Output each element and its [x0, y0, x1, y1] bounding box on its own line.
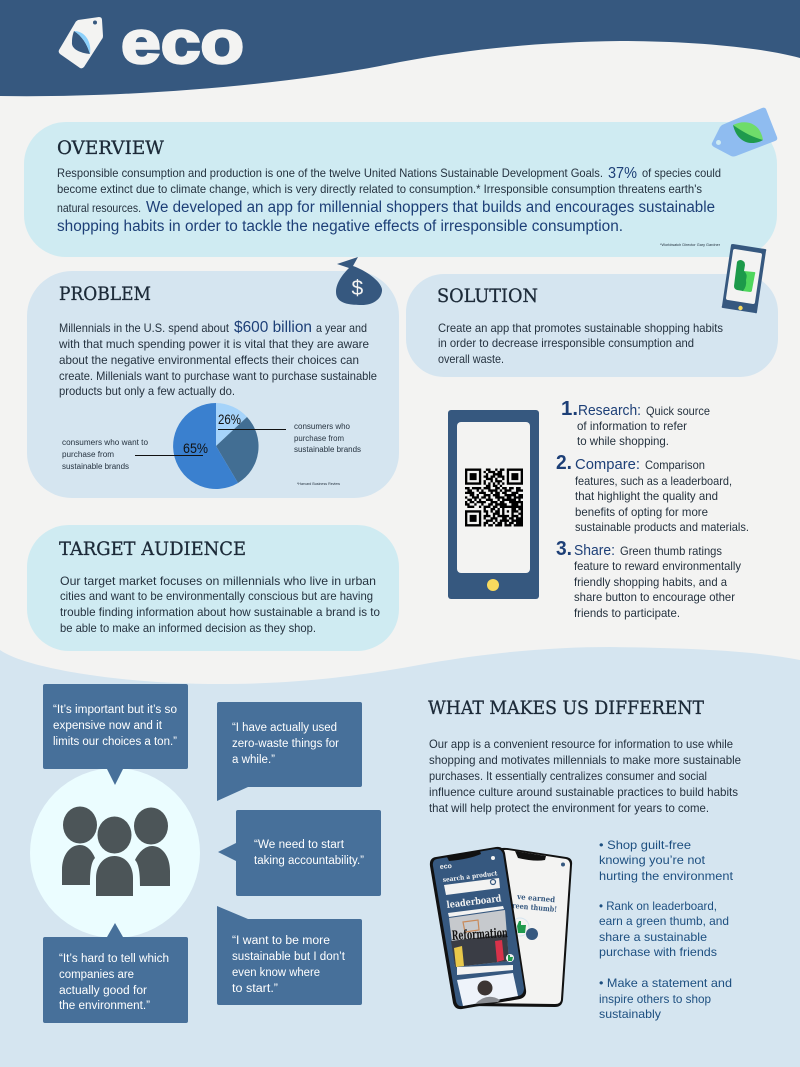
- problem text: create. Millenials want to purchase want to purchase sustainable: [59, 369, 377, 383]
- step 2: compare: benefits of opting for more: [575, 505, 708, 519]
- pie label: purchasers: purchase from: [294, 434, 344, 443]
- logo wordmark: eco: [121, 9, 244, 76]
- overview text: [57, 165, 721, 235]
- back phone: earned green thumb: [470, 848, 572, 1007]
- icon: money bag: [336, 257, 382, 305]
- step 3: share: feature to reward environmentally: [574, 559, 741, 573]
- front phone: leaderboard: [430, 847, 526, 1009]
- step 2: compare: sustainable products and materials.: [575, 520, 749, 534]
- speech bubble: which companies: actually good for: [59, 985, 147, 997]
- target audience text: Our target market focuses on millennials who live in urban: [60, 574, 376, 588]
- overview text: 37%: [608, 165, 637, 182]
- problem text: $600 billion: [234, 319, 312, 336]
- problem text: with that much spending power it is vital that they are aware: [58, 337, 369, 351]
- bullet: make a statement: inspire others to shop: [599, 992, 711, 1006]
- speech bubble: which companies: “It’s hard to tell which: [59, 953, 169, 965]
- problem text: [58, 319, 377, 398]
- different text: [429, 737, 741, 815]
- speech bubble: expensive: [43, 684, 188, 785]
- icon: leaf price tag: [712, 108, 777, 156]
- speech bubble: which companies: the environment.”: [59, 1000, 150, 1012]
- speech bubble: accountability: taking accountability.”: [254, 855, 364, 867]
- front phone: leaderboard: eco: [440, 863, 452, 871]
- different text: purchases. It essentially centralizes consumer and social: [429, 769, 707, 783]
- pie label: want to purchase: consumers who want to: [62, 438, 149, 447]
- step 1: research: 1.: [561, 398, 578, 420]
- pie label: want to purchase: sustainable brands: [62, 462, 129, 471]
- different text: that will help protect the environment for years to come.: [429, 801, 709, 815]
- target audience text: cities and want to be environmentally conscious but are having: [60, 589, 373, 603]
- pie chart: 65%: [183, 440, 208, 456]
- bullet: make a statement: • Make a statement and: [599, 976, 732, 990]
- step 1: research: [561, 398, 710, 448]
- speech bubble: where to start: sustainable but I don’t: [232, 951, 346, 963]
- overview text: We developed an app for millennial shoppers that builds and encourages sustainable: [146, 199, 715, 216]
- step 3: share: Share:: [574, 542, 615, 559]
- phone mockups: [430, 847, 572, 1009]
- step 3: share: [556, 538, 741, 620]
- speech bubble: where to start: [217, 906, 362, 1005]
- step 2: compare: 2.: [556, 452, 572, 474]
- solution text: overall waste.: [438, 352, 504, 366]
- speech bubble: where to start: even know where: [232, 967, 320, 979]
- icon: group of people: [62, 806, 170, 896]
- target audience text: trouble finding information about how sustainable a brand is to: [60, 605, 380, 619]
- step 2: compare: features, such as a leaderboard,: [575, 474, 732, 488]
- speech bubble: which companies: companies are: [59, 969, 134, 981]
- speech bubble: accountability: “We need to start: [254, 839, 345, 851]
- header band: [0, 0, 800, 96]
- solution steps: [556, 398, 749, 620]
- qr code: [465, 470, 523, 525]
- bullet: shop guilt-free: hurting the environment: [599, 869, 734, 883]
- speech bubble: zero-waste: [217, 702, 362, 801]
- step 1: research: to while shopping.: [577, 434, 669, 448]
- step 3: share: Green thumb ratings: [620, 544, 722, 558]
- pie label: want to purchase: purchase from: [62, 450, 114, 459]
- speech bubble: zero-waste: a while.”: [232, 754, 275, 766]
- step 3: share: friends to participate.: [574, 606, 680, 620]
- back phone: earned green thumb: ve earned: [516, 892, 556, 904]
- step 1: research: Quick source: [646, 404, 710, 418]
- bullet: rank on leaderboard: • Rank on leaderboard,: [599, 899, 717, 913]
- step 3: share: friendly shopping habits, and a: [574, 575, 727, 589]
- heading: solution: SOLUTION: [437, 285, 538, 307]
- step 1: research: Research:: [578, 402, 641, 419]
- problem text: products but only a few actually do.: [59, 384, 235, 398]
- icon: money bag: $: [352, 277, 364, 300]
- different text: Our app is a convenient resource for information to use while: [429, 737, 733, 751]
- problem text: about the negative environmental effects their choices can: [59, 353, 359, 367]
- bullet: rank on leaderboard: share a sustainable: [599, 930, 707, 944]
- bottom background wave: [0, 647, 800, 1067]
- front phone: leaderboard: leaderboard: [446, 893, 502, 911]
- step 3: share: share button to encourage other: [574, 590, 735, 604]
- different text: influence culture around sustainable practices to build habits: [429, 785, 738, 799]
- bullet: rank on leaderboard: purchase with friends: [599, 945, 717, 959]
- overview text: of species could: [642, 166, 721, 180]
- panel: solution: [406, 274, 778, 377]
- bullet: make a statement: [599, 976, 732, 1021]
- footnote: worldwatch: *Worldwatch Director Gary Gardner: [660, 242, 721, 247]
- pie chart: [135, 403, 286, 489]
- overview text: Responsible consumption and production is one of the twelve United Nations Sustainable Development Goals.: [57, 166, 603, 180]
- front phone: leaderboard: Reformation: [451, 926, 508, 944]
- step 2: compare: that highlight the quality and: [575, 489, 718, 503]
- step 2: compare: Compare:: [575, 456, 640, 473]
- bullet: shop guilt-free: • Shop guilt-free: [599, 838, 691, 852]
- target audience text: [60, 574, 380, 635]
- bullet: shop guilt-free: knowing you’re not: [599, 853, 706, 867]
- people circle: [30, 768, 200, 938]
- step 1: research: of information to refer: [577, 419, 687, 433]
- speech bubble: zero-waste: zero-waste things for: [232, 738, 339, 750]
- different text: shopping and motivates millennials to make more sustainable: [429, 753, 741, 767]
- speech bubble: expensive: “It’s important but it’s so: [53, 704, 177, 716]
- panel: overview: [24, 122, 777, 257]
- heading: problem: PROBLEM: [59, 283, 151, 305]
- step 3: share: 3.: [556, 538, 572, 560]
- overview text: become extinct due to climate change, which is very directly related to consumption.* Irresponsible consumption threatens earth's: [57, 182, 702, 196]
- speech bubble: expensive: expensive now and it: [53, 720, 163, 732]
- speech bubble: which companies: [43, 923, 188, 1023]
- pie label: want to purchase: [62, 438, 149, 471]
- problem text: a year and: [316, 321, 367, 335]
- step 2: compare: Comparison: [645, 458, 705, 472]
- target audience text: be able to make an informed decision as they shop.: [60, 621, 316, 635]
- heading: what makes us different: WHAT MAKES US DIFFERENT: [428, 697, 704, 719]
- bullet: make a statement: sustainably: [599, 1007, 661, 1021]
- step 2: compare: [556, 452, 749, 534]
- speech bubble: zero-waste: “I have actually used: [232, 722, 337, 734]
- front phone: leaderboard: search a product: [442, 869, 498, 884]
- pie chart: 26%: [218, 412, 241, 427]
- problem text: Millennials in the U.S. spend about: [59, 321, 230, 335]
- heading: overview: OVERVIEW: [57, 137, 164, 159]
- overview text: shopping habits in order to tackle the negative effects of irresponsible consumption.: [57, 218, 623, 235]
- pie label: purchasers: sustainable brands: [294, 445, 361, 454]
- icon: phone with qr code: [448, 410, 539, 599]
- speech bubble: expensive: limits our choices a ton.”: [53, 736, 177, 748]
- solution text: Create an app that promotes sustainable shopping habits: [438, 321, 723, 335]
- heading: target audience: TARGET AUDIENCE: [59, 538, 246, 560]
- logo: eco: [59, 9, 244, 76]
- solution text: in order to decrease irresponsible consumption and: [438, 336, 694, 350]
- bullet: rank on leaderboard: [599, 899, 729, 959]
- pie label: purchasers: [294, 422, 361, 454]
- solution text: [438, 321, 723, 366]
- panel: target audience: [27, 525, 399, 651]
- bullet: rank on leaderboard: earn a green thumb, and: [599, 914, 729, 928]
- speech bubble: where to start: to start.”: [232, 983, 278, 995]
- footnote: harvard: *Harvard Business Review: [297, 481, 340, 486]
- bullet: shop guilt-free: [599, 838, 734, 883]
- speech bubble: where to start: “I want to be more: [232, 935, 330, 947]
- pie label: purchasers: consumers who: [294, 422, 351, 431]
- back phone: earned green thumb: reen thumb!: [512, 901, 557, 914]
- icon: phone with green thumb: [722, 244, 766, 313]
- icon: price tag with leaf: [59, 17, 103, 68]
- panel: problem: [27, 271, 399, 498]
- overview text: natural resources.: [57, 201, 141, 215]
- speech bubble: accountability: [218, 810, 381, 896]
